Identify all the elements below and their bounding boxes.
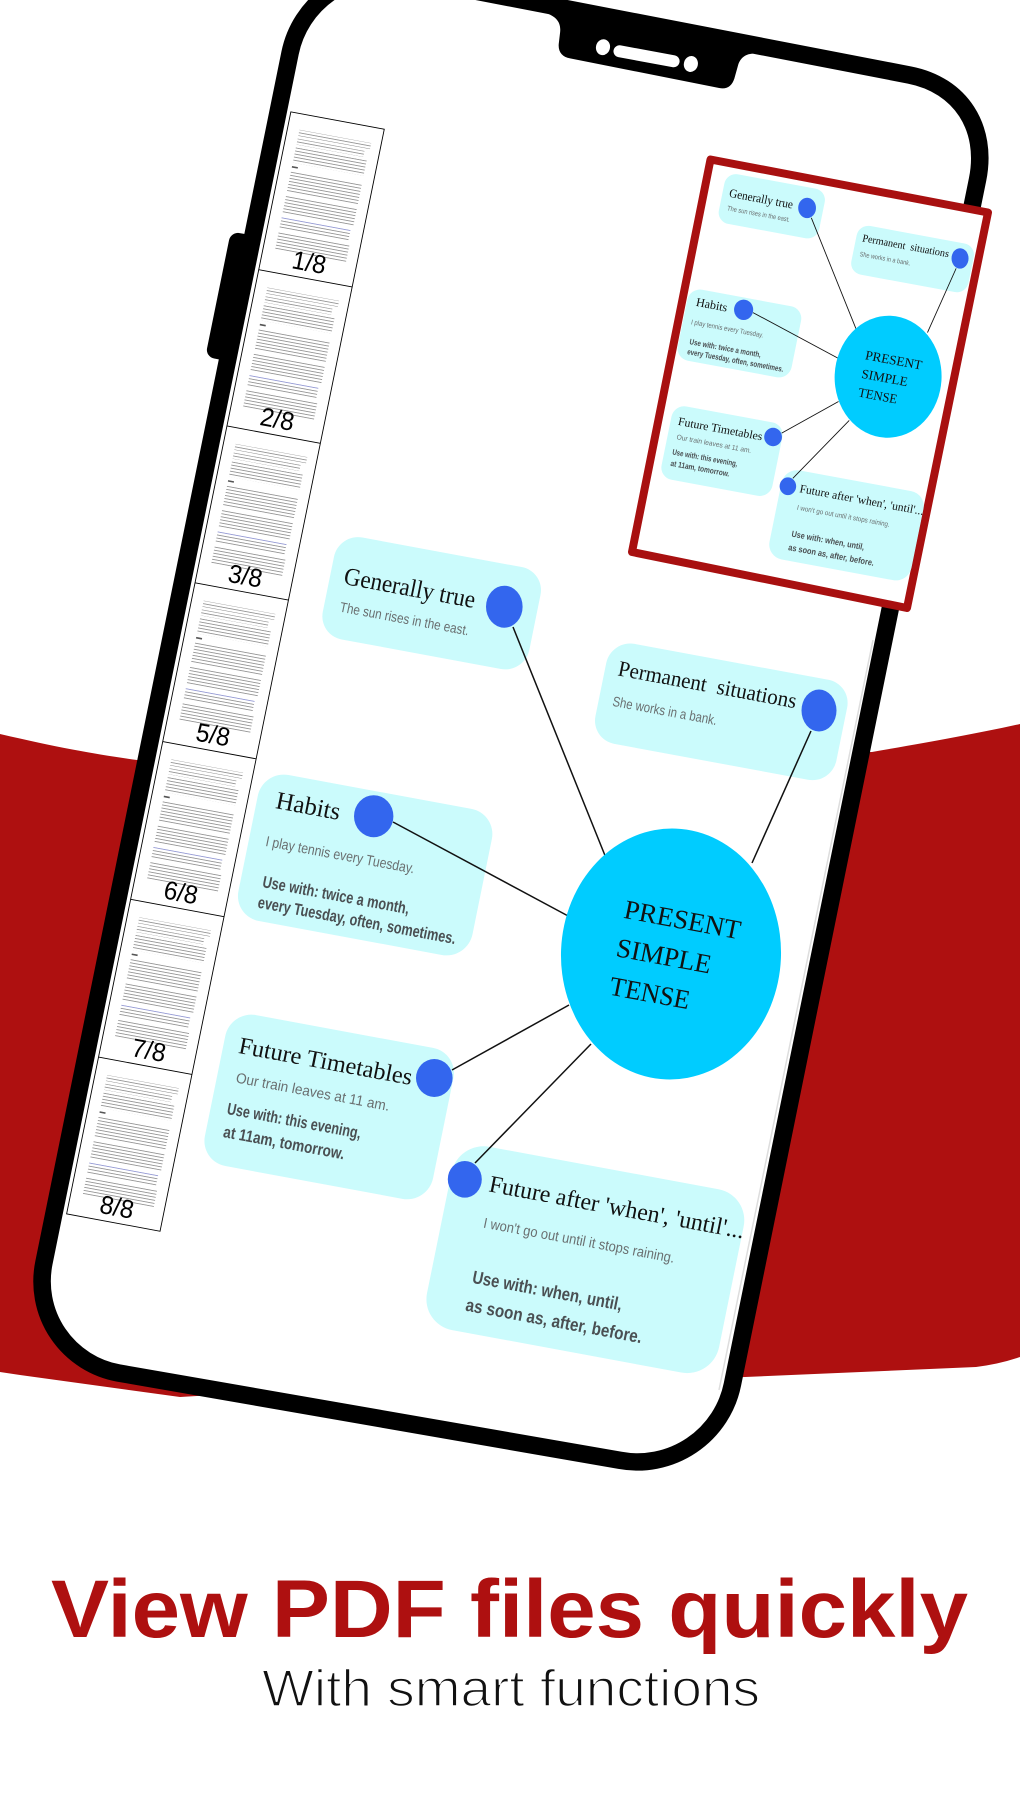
node: future after when until: I won't go out until it stops raining. [482,1216,676,1267]
mind map: preview: at 11am, tomorrow. [670,459,730,479]
center node: present simple tense: PRESENT [622,894,744,945]
page thumbnail strip: 5/8 [193,717,233,752]
node: habits: I play tennis every Tuesday. [264,834,416,877]
node: future timetables: Future Timetables [236,1033,415,1091]
page thumbnail strip: 6/8 [161,875,201,910]
mind map: preview: Habits [695,295,729,315]
node: permanent situations [591,640,852,784]
node: future timetables: Use with: this evening, [225,1100,363,1143]
node: permanent situations: Permanent situations [616,656,799,713]
mind map: preview: Use with: when, until, [791,529,865,552]
node: generally true [318,533,545,673]
mind map: preview: every Tuesday, often, sometimes. [687,347,784,374]
node: future timetables: Our train leaves at 11 am. [234,1071,391,1115]
node: generally true: The sun rises in the east. [339,599,471,638]
mind map: preview: Permanent situations [861,232,950,260]
mind map: preview: Generally true [728,186,794,212]
node: habits [233,770,497,960]
connectors [393,627,811,1163]
mind map: preview: TENSE [857,385,899,407]
mind map: preview: Future Timetables [677,415,764,443]
mind map: preview [640,170,983,583]
phone body [25,0,996,1483]
mind map: preview: Use with: twice a month, [689,337,762,359]
node: future after when until: Use with: when, until, [471,1267,624,1314]
page thumbnail strip: 8/8 [97,1189,137,1225]
mind map: preview: Our train leaves at 11 am. [676,434,752,455]
page thumbnail strip: 1/8 [290,244,329,280]
node: habits: Use with: twice a month, [261,873,411,918]
center node: present simple tense [556,824,786,1084]
icon: speaker [594,38,699,73]
notch [531,4,767,95]
mind map: preview: Future after 'when', 'until'... [799,482,925,518]
mind map: main [200,533,852,1379]
mind map: preview: I won't go out until it stops raining. [796,505,890,529]
mind map: preview: PRESENT [864,347,923,373]
page thumbnail strip: 7/8 [129,1032,169,1068]
node: generally true: Generally true [342,563,478,614]
phone [3,0,996,1483]
center node: present simple tense: SIMPLE [614,933,714,979]
red frame [632,160,988,608]
title: View PDF files quickly [51,1564,968,1655]
red background band [0,724,1020,1397]
mind map: preview: The sun rises in the east. [726,205,791,224]
node: future timetables: at 11am, tomorrow. [222,1123,346,1163]
mind map: preview: I play tennis every Tuesday. [690,319,764,340]
mind map: preview: She works in a bank. [859,251,911,267]
mind map: preview: Use with: this evening, [672,448,738,468]
node: habits: Habits [274,787,343,826]
page thumbnail strip [67,112,384,1231]
node: habits: every Tuesday, often, sometimes. [256,894,457,948]
mind map: preview: SIMPLE [860,366,909,389]
node: future after when until [421,1141,751,1379]
page thumbnail strip: 2/8 [258,401,297,437]
node: future after when until: Future after 'when', 'until'... [487,1172,747,1244]
screen edge line [719,640,873,1390]
inset panel: red framed preview [632,160,988,608]
node: future timetables [200,1010,459,1204]
subtitle: With smart functions [262,1660,760,1718]
mind map: preview: as soon as, after, before. [787,542,875,568]
node: permanent situations: She works in a bank. [611,693,719,728]
center node: present simple tense: TENSE [607,971,693,1015]
icon: side button [205,231,254,361]
node: future after when until: as soon as, after, before. [464,1295,644,1347]
page thumbnail strip: 3/8 [226,558,265,594]
